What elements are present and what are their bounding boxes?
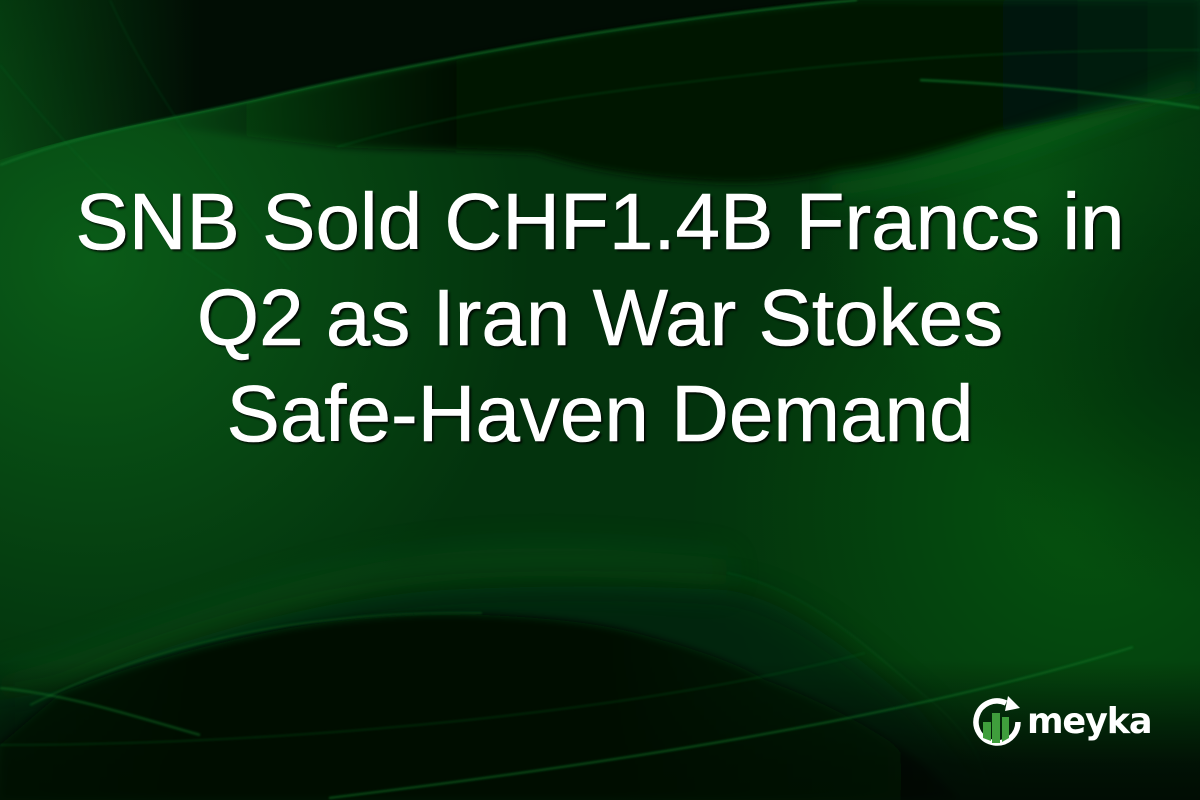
wordmark: meyka <box>1027 701 1151 742</box>
logo: meyka <box>973 696 1151 746</box>
title: SNB Sold CHF1.4B Francs in <box>75 177 1125 266</box>
icon: circular arrow with bars <box>973 696 1021 746</box>
title: Q2 as Iran War Stokes <box>197 273 1003 362</box>
title <box>75 177 1125 458</box>
title: Safe-Haven Demand <box>226 369 974 458</box>
